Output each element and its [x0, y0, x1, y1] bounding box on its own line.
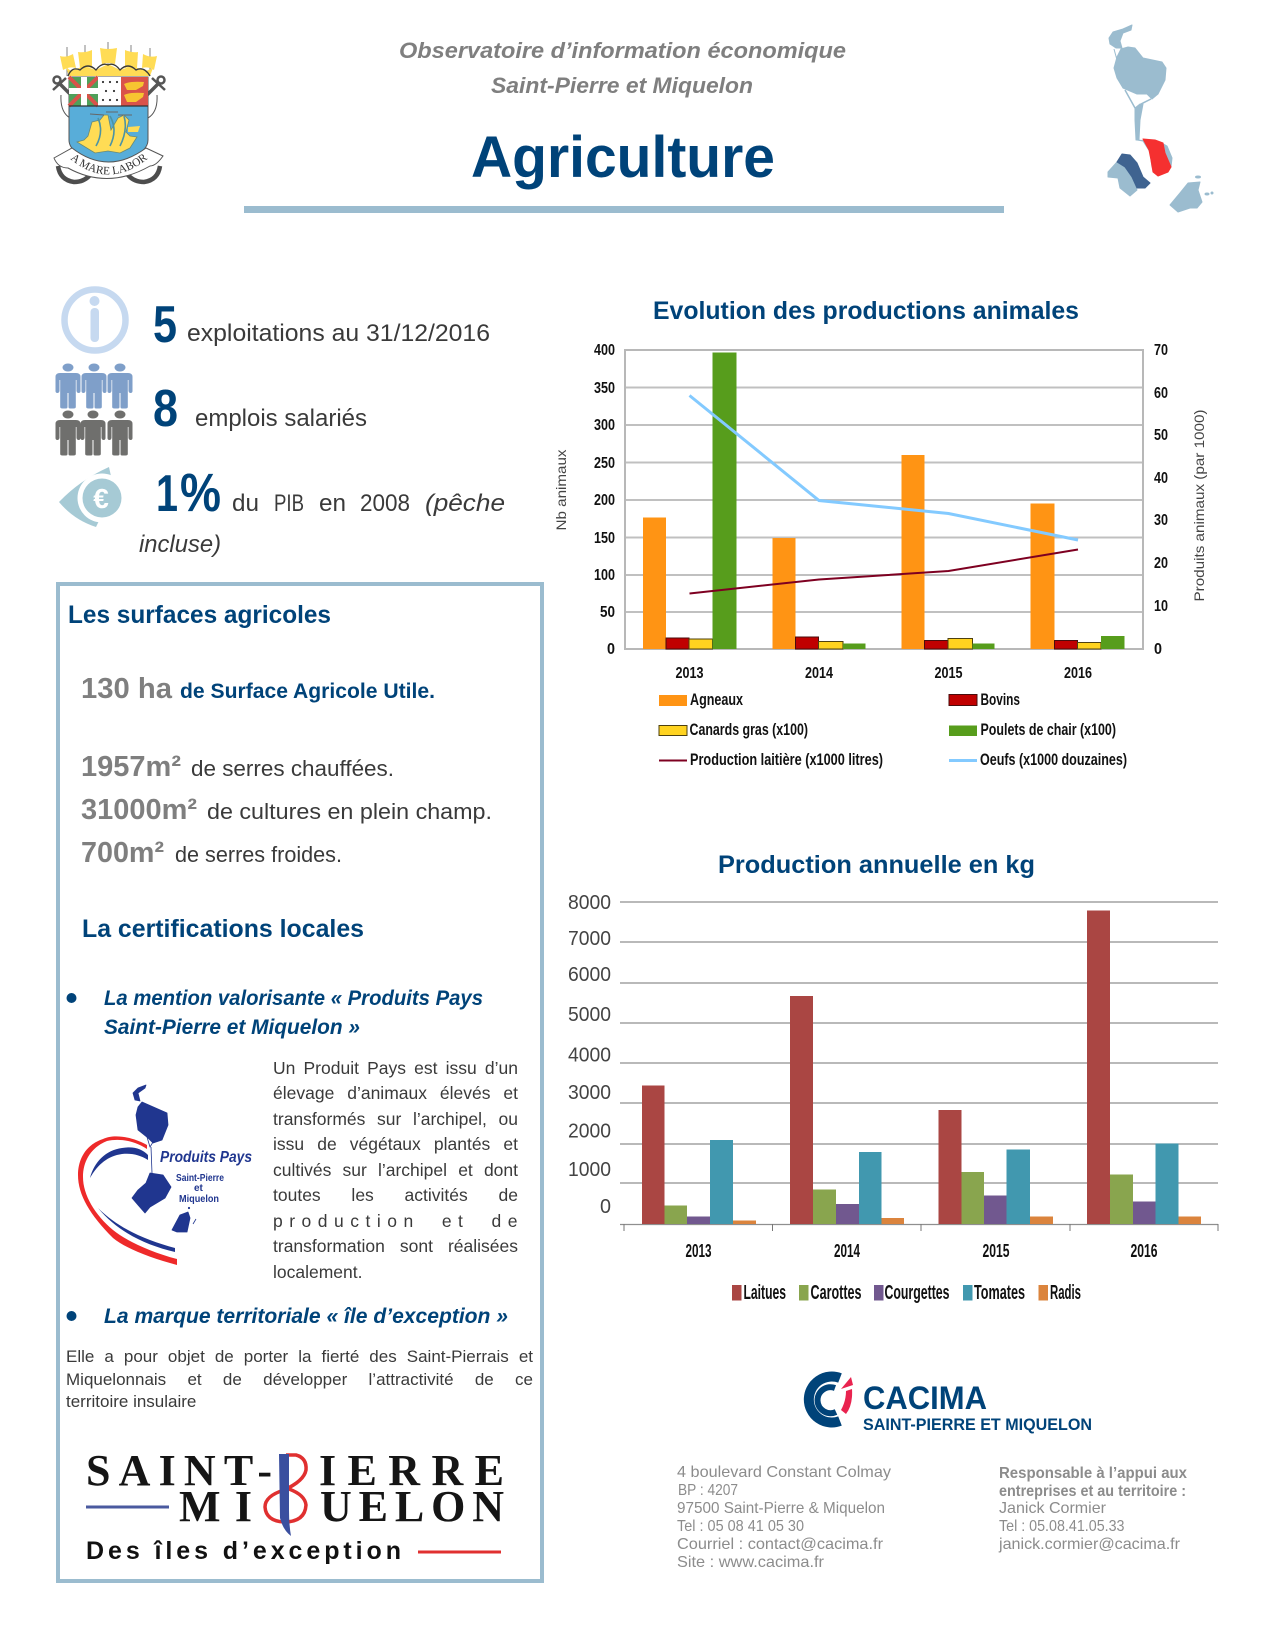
text: marque territoriale: Elle a pour objet de porter la fierté des Saint-Pierrais et: [66, 1347, 533, 1366]
x labels: 2016: [1130, 1241, 1158, 1261]
contact: adresse: Site : www.cacima.fr: [677, 1554, 825, 1571]
logo: des îles d'exception: UELON: [320, 1482, 504, 1531]
serres chauffées: de serres chauffées.: [191, 756, 394, 781]
serres froides: 700m²: [81, 837, 164, 869]
bullet: produits pays: La mention valorisante « Produits Pays: [104, 987, 483, 1010]
logo: des îles d'exception: Des îles d’exception: [86, 1537, 401, 1565]
contact: adresse: 4 boulevard Constant Colmay: [677, 1464, 891, 1481]
serres chauffées: 1957m²: [81, 751, 181, 783]
contact: responsable: [998, 1465, 1187, 1553]
logo: des îles d'exception: IERRE: [319, 1446, 504, 1495]
contact: adresse: Tel : 05 08 41 05 30: [677, 1518, 804, 1535]
bars: radis: [733, 1216, 1201, 1224]
x labels: 2013: [676, 665, 704, 682]
description: PIB: [274, 490, 304, 517]
text: définition produit pays: Un Produit Pays est issu d’un: [273, 1058, 518, 1078]
right axis labels: 30: [1154, 512, 1168, 529]
header: observatory name: [399, 38, 846, 98]
text: définition produit pays: cultivés sur l’archipel et dont: [273, 1160, 518, 1180]
ship: [77, 112, 140, 153]
title rule: [244, 206, 1004, 213]
legend: Production laitière (x1000 litres): [690, 750, 883, 769]
logo: produits pays: Miquelon: [179, 1194, 219, 1205]
text: marque territoriale: Miquelonnais et de développer l’attractivité de ce: [66, 1370, 533, 1388]
y labels: 5000: [568, 1004, 611, 1026]
icon: information: [64, 290, 126, 350]
bars: agneaux: [643, 455, 1054, 649]
x labels: [686, 1241, 1158, 1261]
right axis labels: 50: [1154, 427, 1168, 444]
cultures en plein champ: de cultures en plein champ.: [207, 799, 492, 824]
logo: des îles d'exception: MI: [179, 1482, 252, 1531]
surface agricole utile: 130 ha: [81, 673, 173, 705]
legend: [659, 690, 1127, 769]
x labels: 2014: [805, 665, 833, 682]
description: incluse): [139, 531, 221, 558]
text: définition produit pays: transformation sont réalisées: [273, 1236, 518, 1256]
surface agricole utile: [81, 673, 435, 705]
bars: bovins: [666, 637, 1078, 649]
y labels: 1000: [568, 1159, 611, 1181]
y labels: 4000: [568, 1044, 611, 1066]
x labels: 2015: [934, 665, 963, 682]
bars: carottes: [664, 1172, 1133, 1224]
contact: adresse: BP : 4207: [678, 1482, 738, 1499]
x labels: 2013: [686, 1241, 712, 1261]
bars: courgettes: [687, 1196, 1156, 1224]
value: 5: [153, 296, 177, 354]
left axis labels: 350: [594, 380, 615, 397]
contact: responsable: janick.cormier@cacima.fr: [998, 1536, 1181, 1553]
left axis labels: 0: [607, 641, 615, 658]
logo: produits pays: [78, 1085, 252, 1265]
serres froides: de serres froides.: [175, 842, 342, 867]
line: production laitière: [690, 550, 1078, 594]
left axis labels: 300: [594, 417, 615, 434]
chart title: productions animales: Evolution des productions animales: [653, 297, 1079, 325]
description: en: [319, 490, 346, 517]
right axis labels: 70: [1154, 342, 1168, 359]
axis title left: Nb animaux: [553, 450, 569, 530]
contact: adresse: Courriel : contact@cacima.fr: [677, 1536, 884, 1553]
text: définition produit pays: issu de végétaux plantés et: [273, 1134, 518, 1154]
logo: CACIMA: [809, 1376, 1092, 1434]
stat: PIB: [59, 463, 505, 558]
axis title right: Produits animaux (par 1000): [1191, 410, 1207, 602]
legend: Oeufs (x1000 douzaines): [980, 750, 1127, 769]
bars: laitues: [642, 910, 1110, 1224]
legend: Poulets de chair (x100): [980, 720, 1116, 739]
map of the archipelago: [1108, 25, 1213, 212]
bars: tomates: [710, 1140, 1178, 1224]
contact: adresse: 97500 Saint-Pierre & Miquelon: [677, 1500, 885, 1517]
serres froides: [81, 837, 342, 869]
y labels: [568, 892, 611, 1218]
text: marque territoriale: [66, 1346, 533, 1416]
x labels: 2014: [834, 1241, 860, 1261]
cultures en plein champ: 31000m²: [81, 794, 197, 826]
crossed anchors: [53, 76, 165, 118]
logo: des îles d'exception: SAINT-: [86, 1446, 272, 1495]
bars: poulets de chair: [712, 352, 1124, 649]
logo: des îles d'exception: [86, 1446, 504, 1565]
legend: Courgettes: [884, 1282, 950, 1304]
value: 1: [156, 465, 178, 523]
icon: CCI: [809, 1376, 853, 1422]
logo: produits pays: Saint-Pierre: [176, 1173, 224, 1184]
text: définition produit pays: toutes les activités de: [273, 1185, 518, 1205]
value: %: [180, 463, 221, 523]
text: définition produit pays: élevage d’animaux élevés et: [273, 1083, 518, 1103]
right axis labels: 40: [1154, 470, 1168, 487]
heading: surfaces agricoles: Les surfaces agricoles: [68, 601, 331, 629]
text: marque territoriale: territoire insulaire: [66, 1392, 196, 1411]
icon: people: [56, 364, 132, 456]
y labels: 3000: [568, 1082, 611, 1104]
y labels: 7000: [568, 928, 611, 950]
bars: canards gras: [689, 638, 1101, 649]
contact: responsable: entreprises et au territoire :: [999, 1483, 1186, 1500]
description: [139, 490, 505, 558]
contact: responsable: Janick Cormier: [999, 1500, 1107, 1517]
left axis labels: 200: [594, 492, 615, 509]
chart title: production annuelle: Production annuelle en kg: [718, 851, 1035, 879]
y labels: 6000: [568, 964, 611, 986]
right axis labels: 20: [1154, 555, 1168, 572]
bullet: produits pays: Saint-Pierre et Miquelon »: [104, 1016, 360, 1039]
surface agricole utile: de Surface Agricole Utile.: [180, 680, 435, 703]
x labels: [676, 665, 1092, 682]
left axis labels: 250: [594, 455, 615, 472]
title: Agriculture: [471, 125, 775, 190]
left axis labels: [594, 342, 615, 658]
right axis labels: [1154, 342, 1168, 658]
panel: surfaces et certifications: [58, 584, 542, 1581]
y labels: 0: [600, 1196, 611, 1218]
text: définition produit pays: transformés sur l’archipel, ou: [273, 1108, 518, 1128]
legend: Bovins: [980, 690, 1020, 709]
description: du: [232, 490, 259, 517]
right axis labels: 60: [1154, 385, 1168, 402]
description: exploitations au 31/12/2016: [187, 320, 490, 347]
chart: production annuelle: [568, 892, 1218, 1304]
heading: certifications locales: La certifications locales: [82, 915, 364, 943]
legend: Agneaux: [690, 690, 743, 709]
right axis labels: 10: [1154, 598, 1168, 615]
banner and anchors: A MARE LABOR: [70, 154, 148, 174]
bullet: île d'exception: La marque territoriale « île d’exception »: [104, 1305, 508, 1328]
logo: produits pays: et: [194, 1183, 204, 1194]
description: 2008: [360, 490, 410, 517]
chart: productions animales: [553, 342, 1207, 769]
cultures en plein champ: [81, 794, 492, 826]
legend: Radis: [1050, 1282, 1081, 1304]
x labels: 2016: [1064, 665, 1092, 682]
line: oeufs: [690, 396, 1078, 540]
coat of arms: [52, 42, 166, 184]
bullet: produits pays: [66, 987, 483, 1039]
right axis labels: 0: [1154, 641, 1162, 658]
x labels: 2015: [982, 1241, 1010, 1261]
y labels: 8000: [568, 892, 611, 914]
icon: euro: €: [93, 483, 109, 514]
contact: responsable: Tel : 05.08.41.05.33: [999, 1518, 1125, 1535]
legend: [732, 1282, 1081, 1304]
description: emplois salariés: [195, 405, 367, 432]
logo: produits pays: Produits Pays: [160, 1149, 252, 1166]
legend: Carottes: [810, 1282, 862, 1304]
stat: exploitations: [64, 290, 490, 354]
legend: Tomates: [974, 1282, 1025, 1304]
crown of ships: [60, 42, 157, 76]
header: observatory name: Saint-Pierre et Miquelon: [491, 73, 753, 98]
y labels: 2000: [568, 1120, 611, 1142]
text: définition produit pays: localement.: [273, 1262, 362, 1282]
legend: Laitues: [744, 1282, 786, 1304]
legend: Canards gras (x100): [690, 720, 808, 739]
text: définition produit pays: production et de: [273, 1210, 518, 1230]
logo: CACIMA: CACIMA: [863, 1380, 987, 1416]
icon: euro: [59, 467, 126, 527]
left axis labels: 150: [594, 530, 615, 547]
contact: responsable: Responsable à l’appui aux: [999, 1465, 1187, 1482]
contact: adresse: [677, 1464, 891, 1571]
stat: emplois: [56, 364, 367, 456]
logo: CACIMA: SAINT-PIERRE ET MIQUELON: [863, 1416, 1092, 1434]
shield: [69, 77, 148, 165]
text: définition produit pays: [273, 1056, 518, 1288]
value: 8: [153, 380, 178, 438]
value: [156, 463, 221, 523]
serres chauffées: [81, 751, 394, 783]
left axis labels: 50: [600, 604, 615, 621]
description: (pêche: [425, 490, 505, 517]
header: observatory name: Observatoire d’information économique: [399, 38, 846, 63]
left axis labels: 400: [594, 342, 615, 359]
left axis labels: 100: [594, 567, 615, 584]
